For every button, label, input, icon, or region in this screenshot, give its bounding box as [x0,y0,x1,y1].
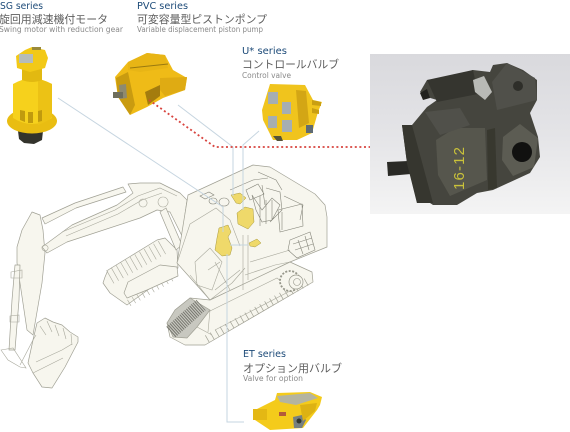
leader: ET series [227,245,248,422]
heading: PVC series: PVC series [137,1,188,12]
engine bay detail [200,172,303,232]
upper structure [177,165,327,300]
boom pivots [42,197,168,251]
arm cylinder top [10,270,22,322]
heading: SG series: Swing motor with reduction gear [0,25,124,34]
leader: PVC series [178,105,233,196]
control valve highlight [231,193,246,204]
photo background [370,54,570,214]
drive sprocket [280,271,303,291]
pump control block [427,70,478,102]
excavator arm [17,212,45,335]
heading: SG series: 旋回用減速機付モータ [0,12,108,26]
product: control valve [262,84,322,141]
upper boom cylinder [42,187,126,224]
heading: U series [242,46,339,80]
option valve highlight [249,239,261,247]
boom cylinder [160,208,182,250]
pump housing facet [436,128,487,196]
pump port flange [502,124,538,176]
heading: ET series: ET series [243,349,286,360]
photo: actual piston pump [370,54,570,214]
product: option valve [253,392,322,430]
pump silhouette [402,63,540,205]
heading: PVC series: Variable displacement piston pump [137,25,263,34]
control valve block highlight [237,207,254,229]
yellow marking: 16-12 [451,147,468,190]
product: piston pump [113,53,187,115]
boom detail lines [62,188,177,236]
heading: PVC series [137,1,267,34]
heading: U series: Control valve [242,71,291,80]
far crawler track [103,238,178,305]
heading: U series: コントロールバルブ [242,57,339,71]
excavator line drawing [1,165,327,388]
heading: U series: U* series [242,46,287,57]
bucket teeth and linkage [1,321,72,373]
bucket [28,318,78,388]
heading: ET series [243,349,342,383]
leader: U series [243,131,259,210]
heading: ET series: オプション用バルブ [243,361,342,375]
near crawler track [167,262,313,345]
battery and grid block [288,232,315,258]
pump flange [402,125,433,203]
swing motor highlight [215,225,232,256]
leader lines [58,98,259,422]
red dotted connector [149,100,370,147]
heading: PVC series: 可変容量型ピストンポンプ [137,12,267,26]
pump shaft [387,161,411,176]
arm cylinder and linkage [9,265,20,350]
heading: SG series: SG series [0,1,43,12]
leader: SG series [58,98,223,232]
excavator boom [42,183,187,253]
cab and frame lines [177,208,290,300]
heading: SG series [0,1,124,34]
heading: ET series: Valve for option [243,374,303,383]
product: swing motor [7,47,57,144]
